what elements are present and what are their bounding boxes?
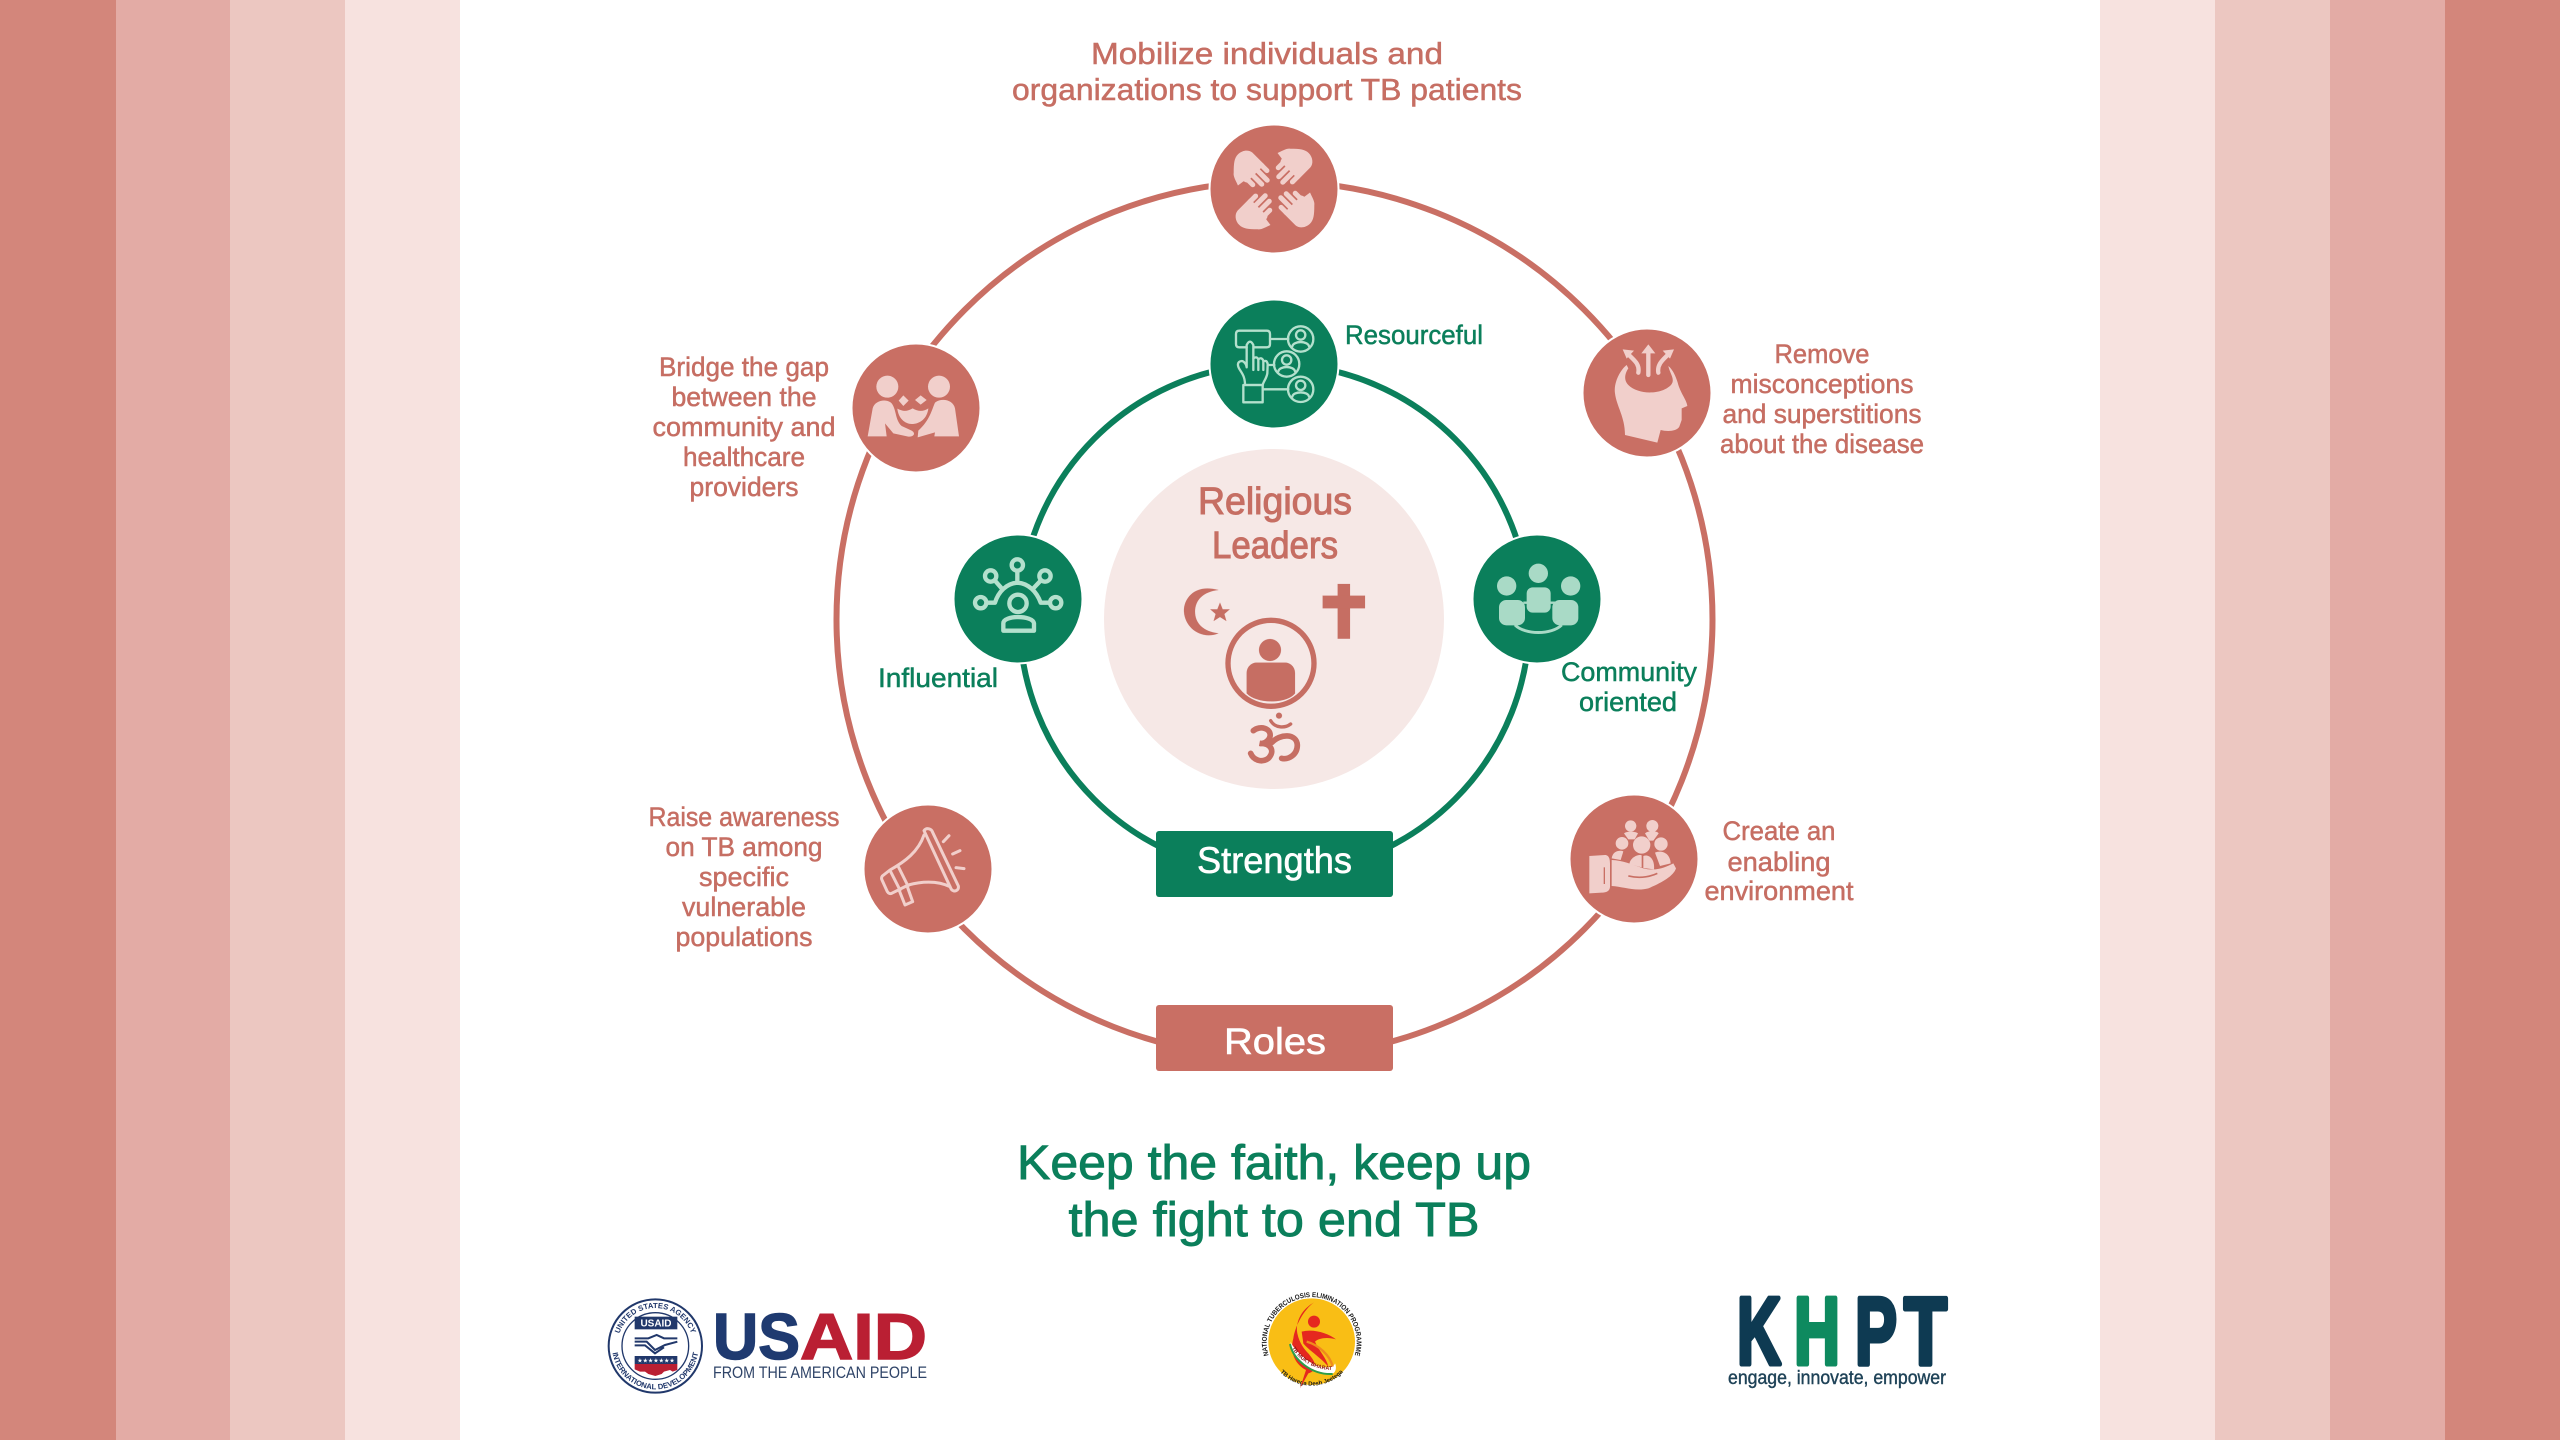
icon: hand selecting people (1236, 326, 1313, 402)
tagline: Keep the faith, keep up (1017, 1137, 1531, 1190)
logo: national TB elimination programme: TB MUKT BHARAT (1292, 1346, 1332, 1370)
logo: KHPT: P (1855, 1278, 1897, 1385)
text: create enabling environment: Create an (1722, 816, 1836, 846)
banner: strengths: Strengths (1197, 840, 1352, 881)
text: mobilize individuals: Mobilize individuals and (1091, 36, 1443, 71)
logo: national TB elimination programme: TB Harega Desh Jeetega (1281, 1369, 1344, 1386)
USAID wordmark: US (713, 1300, 800, 1373)
outer ring: roles (836, 182, 1712, 1058)
node: resourceful (1210, 300, 1338, 428)
text: raise awareness: on TB among (666, 832, 822, 862)
inner ring: strengths (1020, 364, 1530, 874)
text: raise awareness (648, 802, 840, 952)
node: enabling environment (hand holding people icon) (1570, 794, 1698, 924)
logo: national TB elimination programme (1262, 1292, 1362, 1388)
logo: KHPT: H (1794, 1278, 1840, 1385)
icon: four hands (1222, 137, 1326, 241)
logo: KHPT (1728, 1278, 1947, 1389)
logo: national TB elimination programme: NATIONAL TUBERCULOSIS ELIMINATION PROGRAMME (1262, 1292, 1362, 1356)
USAID seal: ★★★★★★★ (637, 1357, 675, 1364)
logo: USAID: AID (800, 1300, 927, 1373)
text: remove misconceptions (1720, 339, 1924, 459)
text: raise awareness: specific (699, 862, 789, 892)
text: create enabling environment (1704, 816, 1854, 906)
text: remove misconceptions: Remove (1774, 339, 1870, 369)
label: resourceful: Resourceful (1345, 320, 1483, 350)
node: raise awareness (megaphone icon) (864, 804, 992, 934)
text: mobilize individuals: organizations to support TB patients (1012, 72, 1522, 107)
icon: hand holding people (1589, 820, 1676, 893)
node: community oriented (1472, 534, 1602, 664)
text: remove misconceptions: misconceptions (1730, 369, 1914, 399)
text: bridge the gap: providers (690, 472, 798, 502)
banner: strengths (1156, 831, 1393, 897)
tagline (1017, 1137, 1531, 1247)
node: influential (954, 534, 1082, 664)
node: bridge the gap (people with bowl icon) (852, 344, 980, 472)
icon: megaphone (882, 829, 964, 905)
left striped band (0, 0, 460, 1440)
text: raise awareness: Raise awareness (648, 802, 840, 832)
label: community oriented (1561, 657, 1697, 717)
USAID seal: USAID (640, 1319, 672, 1330)
USAID seal: INTERNATIONAL DEVELOPMENT (612, 1352, 698, 1390)
icon: head with arrows (1615, 344, 1687, 443)
text: remove misconceptions: and superstitions (1722, 399, 1922, 429)
text: create enabling environment: enabling (1728, 847, 1830, 877)
text: bridge the gap: between the (672, 382, 816, 412)
text: remove misconceptions: about the disease (1720, 429, 1924, 459)
centre heading: Leaders (1212, 525, 1338, 567)
centre heading (1198, 481, 1352, 567)
text: bridge the gap: community and (652, 412, 836, 442)
label: influential: Influential (878, 663, 998, 693)
logo: KHPT: K (1737, 1278, 1781, 1385)
label: community oriented: oriented (1579, 687, 1677, 717)
right striped band (2100, 0, 2560, 1440)
icon: faith symbols and person (1184, 584, 1365, 761)
icon: two people sharing (868, 376, 959, 437)
text: bridge the gap (652, 352, 836, 502)
text: raise awareness: vulnerable (682, 892, 806, 922)
centre heading: Religious (1198, 481, 1352, 523)
text: mobilize individuals (1012, 36, 1522, 107)
text: bridge the gap: Bridge the gap (659, 352, 829, 382)
node: remove misconceptions (head icon) (1582, 328, 1712, 458)
centre panel: religious leaders (1104, 449, 1444, 789)
text: bridge the gap: healthcare (683, 442, 805, 472)
text: create enabling environment: environment (1704, 876, 1854, 906)
icon: person with network (975, 559, 1061, 631)
banner: roles (1156, 1005, 1393, 1071)
node: mobilize (hands icon) (1210, 124, 1338, 254)
label: community oriented: Community (1561, 657, 1697, 687)
text: raise awareness: populations (676, 922, 812, 952)
logo: USAID: FROM THE AMERICAN PEOPLE (713, 1363, 927, 1382)
USAID seal (608, 1298, 703, 1394)
icon: group of people (1497, 564, 1580, 632)
logo: KHPT: T (1904, 1278, 1947, 1385)
banner: roles: Roles (1224, 1021, 1326, 1062)
USAID seal: UNITED STATES AGENCY (614, 1302, 696, 1333)
KHPT strapline: engage, innovate, empower (1728, 1368, 1947, 1389)
logo: USAID (608, 1298, 927, 1394)
tagline: the fight to end TB (1068, 1194, 1480, 1247)
